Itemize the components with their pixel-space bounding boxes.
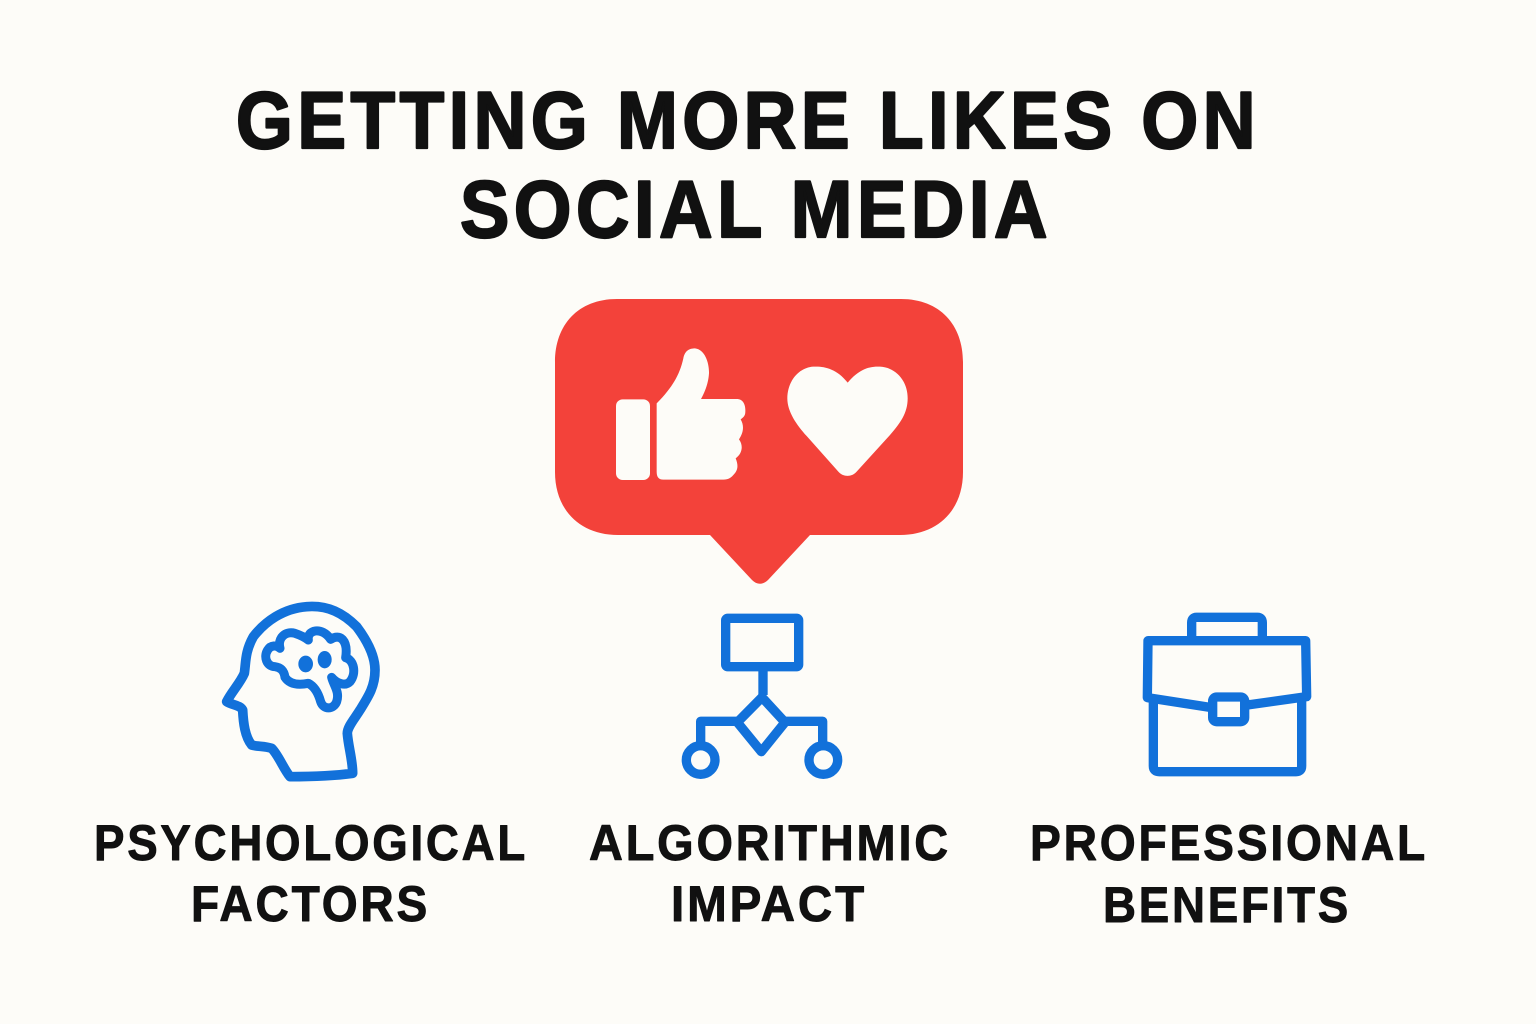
- label: professional benefits: [1030, 815, 1428, 933]
- label: algorithmic impact: ALGORITHMIC: [589, 815, 951, 871]
- icon: thumbs up: [616, 348, 745, 480]
- label: psychological factors: FACTORS: [191, 876, 430, 932]
- icon: briefcase: [1147, 617, 1307, 772]
- title: SOCIAL MEDIA: [460, 165, 1052, 255]
- label: algorithmic impact: IMPACT: [671, 876, 867, 932]
- icon: flowchart: [686, 618, 838, 774]
- label: psychological factors: [94, 815, 528, 932]
- icon: head with brain: [227, 606, 375, 777]
- bubble shape: [555, 299, 963, 584]
- icon: heart: [787, 367, 908, 476]
- label: algorithmic impact: [589, 815, 951, 932]
- speech bubble with like and heart: [555, 299, 963, 584]
- label: professional benefits: PROFESSIONAL: [1030, 815, 1428, 871]
- brain: [266, 631, 354, 708]
- title: GETTING MORE LIKES ON: [236, 76, 1260, 166]
- label: professional benefits: BENEFITS: [1103, 877, 1351, 933]
- label: psychological factors: PSYCHOLOGICAL: [94, 815, 528, 871]
- title: [236, 76, 1260, 255]
